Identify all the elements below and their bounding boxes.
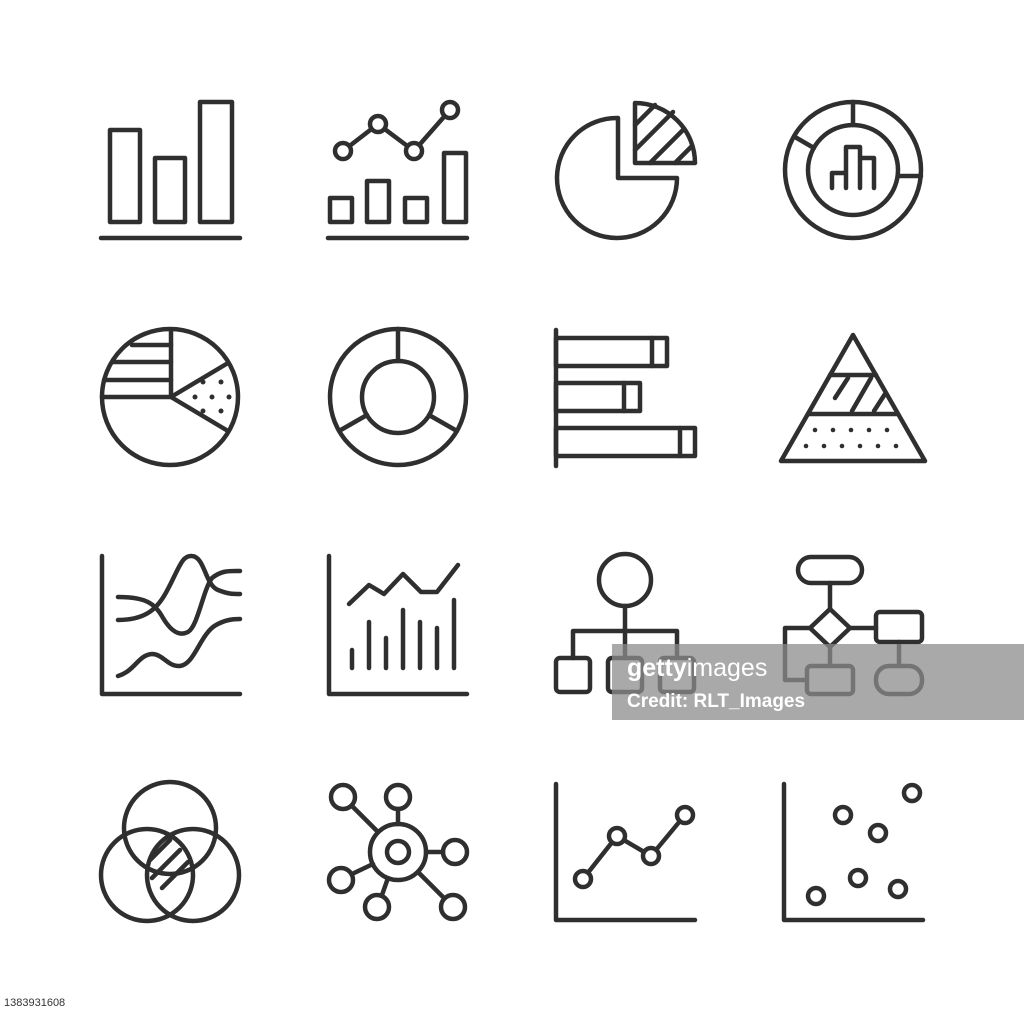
- icon: pyramid: [781, 335, 925, 461]
- icon: venn diagram: [101, 782, 239, 921]
- icon: line and bar chart: [328, 102, 467, 238]
- icon: donut chart: [330, 329, 466, 465]
- icon: trend with bars: [329, 556, 467, 694]
- icon: bar chart: [101, 102, 240, 238]
- icon: donut with bars: [785, 102, 921, 238]
- watermark band: [612, 644, 1024, 720]
- icon: patterned pie chart: [102, 329, 238, 465]
- icon: wave lines chart: [102, 556, 240, 694]
- icon: horizontal bar chart: [556, 330, 695, 466]
- image id: 1383931608: [4, 997, 65, 1009]
- icon: line chart: [556, 784, 695, 920]
- icon: network hub: [329, 785, 467, 919]
- watermark band: Credit: RLT_Images: [627, 691, 805, 712]
- icon: org chart: [556, 554, 694, 692]
- icon: flowchart: [785, 557, 922, 694]
- icon: exploded pie chart: [557, 103, 695, 238]
- watermark band: gettyimages: [627, 654, 767, 682]
- icon: scatter plot: [784, 784, 923, 920]
